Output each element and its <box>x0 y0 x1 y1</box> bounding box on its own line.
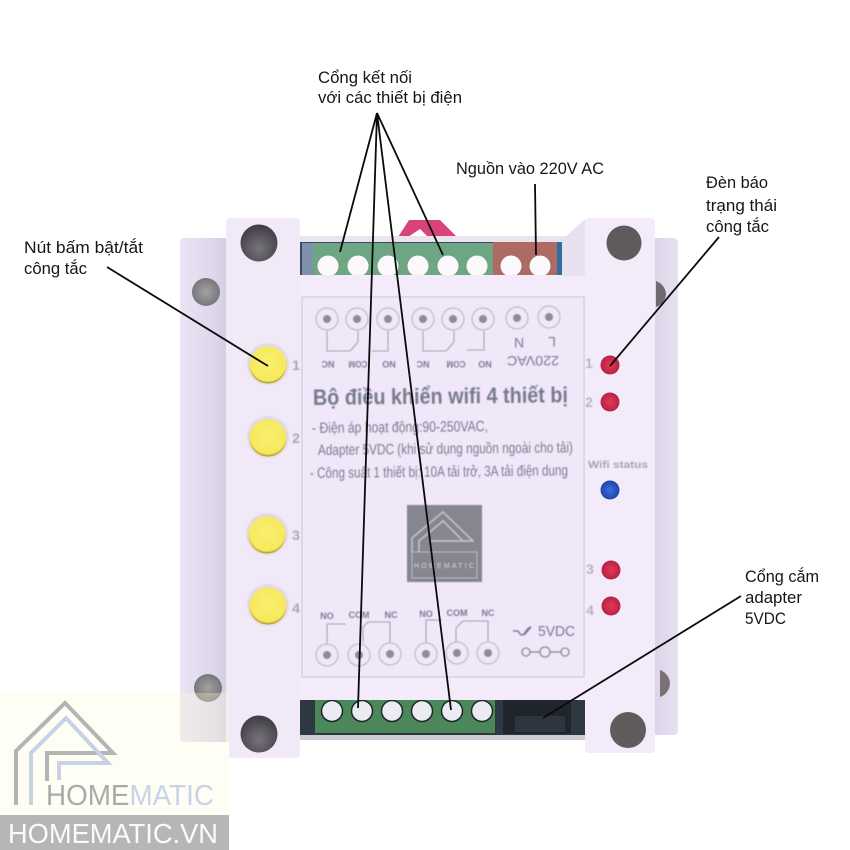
centre body <box>296 275 591 700</box>
top connection diagram: NO <box>478 359 492 369</box>
top connection diagram: COM <box>348 359 368 369</box>
label text: Cổng kết nối <box>318 68 412 87</box>
callout: output ports <box>318 68 462 710</box>
bottom terminal screws <box>322 700 492 722</box>
pink clip behind the terminals <box>398 220 457 237</box>
LED numbers <box>585 355 594 618</box>
callout: status lights: công tắc <box>706 217 769 236</box>
callout: push buttons <box>24 238 268 366</box>
bottom connection diagram: COM <box>446 608 468 618</box>
bottom connection diagram: NO <box>419 609 433 619</box>
5VDC marking: 5VDC <box>538 623 575 640</box>
top connection diagram: N <box>514 335 524 351</box>
button numbers <box>292 357 300 616</box>
yellow push buttons <box>246 343 289 626</box>
sticker logo: HOMEMATIC <box>414 563 474 570</box>
button numbers: 2 <box>292 430 300 446</box>
top connection diagram <box>316 306 560 369</box>
logo house mark <box>16 703 113 805</box>
bottom connection diagram: NO <box>320 611 334 621</box>
top connection diagram: NC <box>416 359 430 369</box>
logo wordmark: HOMEMATIC <box>46 780 214 812</box>
label sticker <box>302 297 584 677</box>
device: wifi relay controller <box>180 218 678 758</box>
front left rail <box>226 218 300 758</box>
sticker logo <box>407 505 482 582</box>
website address: HOMEMATIC.VN <box>8 818 218 849</box>
sticker specifications: - Điện áp hoạt động:90-250VAC, <box>312 418 488 437</box>
bottom connection diagram: NC <box>482 608 495 618</box>
callout: adapter jack: adapter <box>745 588 802 607</box>
sticker title: Bộ điều khiển wifi 4 thiết bị <box>313 382 568 410</box>
top connection diagram: NC <box>321 359 334 369</box>
callout: adapter jack: 5VDC <box>745 609 786 628</box>
sticker specifications <box>310 418 573 482</box>
back flanges <box>180 238 678 742</box>
sticker specifications: - Công suất 1 thiết bị: 10A tải trở, 3A tải điện dung <box>310 462 568 482</box>
label text: với các thiết bị điện <box>318 88 462 107</box>
wifi status label: Wifi status <box>588 460 649 471</box>
bottom connection diagram: COM <box>348 610 370 620</box>
callout: power input: Nguồn vào 220V AC <box>456 159 604 178</box>
LED numbers: 1 <box>585 355 593 371</box>
LED numbers: 3 <box>586 561 594 577</box>
sticker specifications: Adapter 5VDC (khi sử dụng nguồn ngoài cho tải) <box>318 439 573 459</box>
LED numbers: 4 <box>586 602 594 618</box>
button numbers: 3 <box>292 527 300 543</box>
bottom terminal block <box>298 698 588 740</box>
top connection diagram: L <box>548 334 556 350</box>
callout: status lights <box>610 173 777 366</box>
button numbers: 1 <box>292 357 300 373</box>
top connection diagram: NO <box>382 359 396 369</box>
callout: status lights: Đèn báo <box>706 173 768 192</box>
top strip above terminals <box>300 236 585 244</box>
front right rail <box>562 218 655 753</box>
status LEDs <box>600 356 620 616</box>
bottom connection diagram <box>316 608 575 666</box>
top terminal block <box>300 242 565 276</box>
top connection diagram: COM <box>446 359 466 369</box>
button numbers: 4 <box>292 600 300 616</box>
label text <box>318 68 462 107</box>
callout: push buttons: Nút bấm bật/tắt <box>24 238 143 257</box>
LED numbers: 2 <box>585 394 593 410</box>
arrows to terminals <box>340 113 451 710</box>
callout: adapter jack <box>543 567 819 718</box>
callout: push buttons: công tắc <box>24 259 87 278</box>
callout: adapter jack: Cổng cắm <box>745 567 819 586</box>
bottom connection diagram: NC <box>384 610 398 620</box>
top connection diagram: 220VAC <box>507 353 559 369</box>
watermark logo <box>0 693 229 850</box>
top terminal screws <box>318 256 550 276</box>
website band <box>0 815 229 850</box>
callout: status lights: trạng thái <box>706 196 777 215</box>
